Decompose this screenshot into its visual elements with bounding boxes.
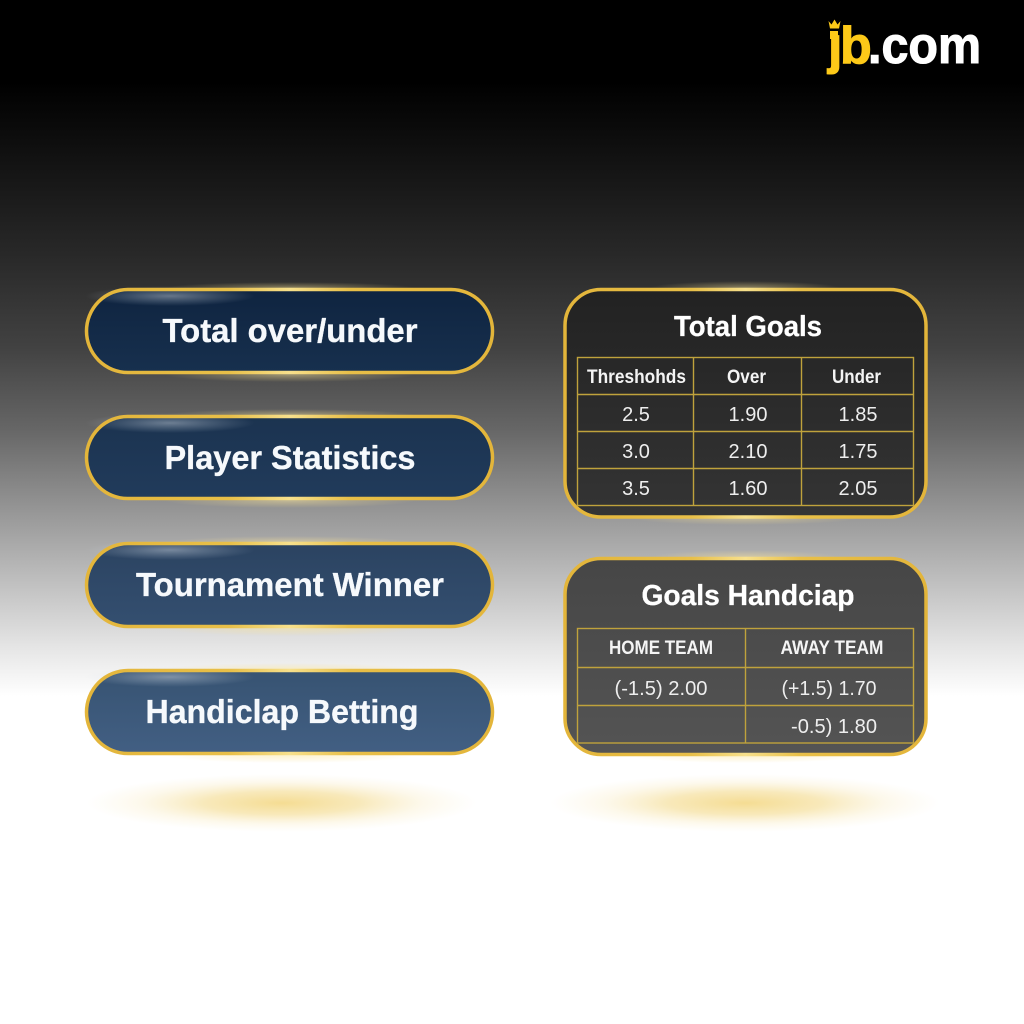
button: Handiclap Betting: Handiclap Betting xyxy=(146,693,418,730)
table: handicap odds: -0.5) 1.80 xyxy=(791,716,877,738)
button: Player Statistics: Player Statistics xyxy=(164,439,416,476)
table: handicap odds: (-1.5) 2.00 xyxy=(614,678,708,700)
logo: jb.com: .com xyxy=(868,17,981,75)
table: total goals odds: 1.75 xyxy=(839,441,877,463)
table: total goals odds: 1.85 xyxy=(839,404,877,426)
table: total goals odds: 2.5 xyxy=(622,404,650,426)
table: total goals odds: Under xyxy=(832,367,882,388)
logo: jb.com xyxy=(826,17,981,75)
table: total goals odds: Over xyxy=(727,367,767,388)
button: Tournament Winner: Tournament Winner xyxy=(136,566,444,603)
table: handicap odds: (+1.5) 1.70 xyxy=(782,678,876,700)
heading: Goals Handciap: Goals Handciap xyxy=(642,580,854,612)
table: total goals odds: 2.05 xyxy=(839,478,877,500)
table: total goals odds: 1.90 xyxy=(729,404,767,426)
table: handicap odds: AWAY TEAM xyxy=(780,638,884,659)
heading: Total Goals: Total Goals xyxy=(674,311,822,343)
table: handicap odds: HOME TEAM xyxy=(609,638,713,659)
button: Tournament Winner xyxy=(85,536,492,636)
glow under panels xyxy=(550,774,940,832)
icon: crown xyxy=(828,20,840,28)
glow under buttons xyxy=(87,774,477,832)
button: Total over/under xyxy=(85,282,492,382)
table: total goals odds: 3.5 xyxy=(622,478,650,500)
button: Player Statistics xyxy=(85,409,492,508)
table: total goals odds: Threshohds xyxy=(587,367,686,388)
table: total goals odds: 2.10 xyxy=(729,441,767,463)
table: total goals odds: 1.60 xyxy=(729,478,767,500)
panel: Goals Handicap xyxy=(565,550,926,763)
table: handicap odds xyxy=(578,628,914,743)
table: total goals odds xyxy=(578,358,914,506)
table: total goals odds: 3.0 xyxy=(622,441,650,463)
button: Total over/under: Total over/under xyxy=(162,312,418,349)
logo: jb.com: jb xyxy=(827,17,872,75)
panel: Total Goals xyxy=(565,281,926,525)
button: Handiclap Betting xyxy=(85,663,492,763)
